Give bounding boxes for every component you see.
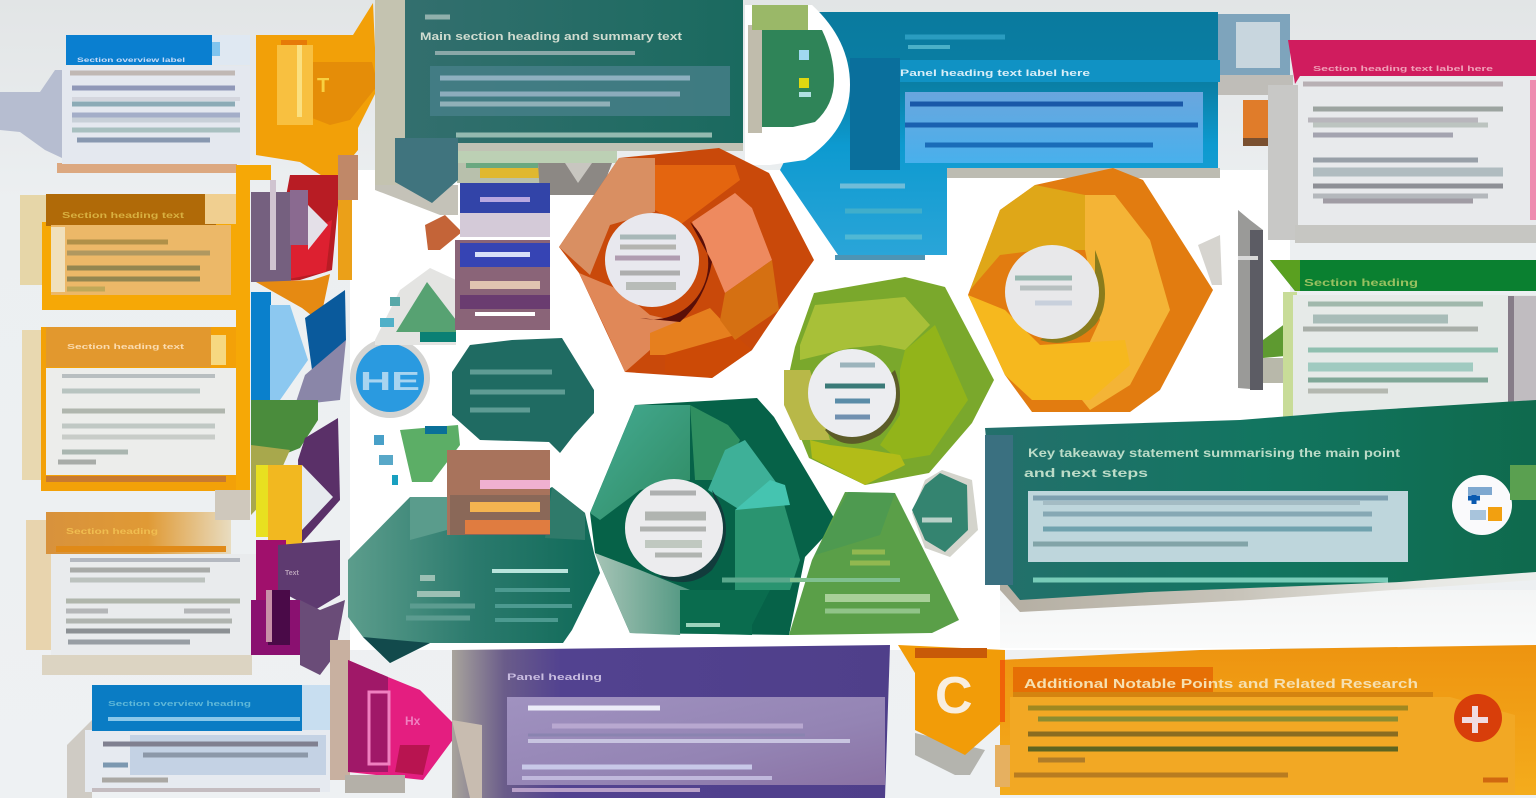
icon column: green and yellow arrow block bbox=[251, 400, 340, 545]
icon column: magenta and purple block bbox=[251, 540, 345, 675]
panel: green card bbox=[1263, 260, 1536, 420]
circle: lime segment label bbox=[808, 349, 900, 444]
stacked box: purple bbox=[455, 240, 550, 330]
icon column: purple and red arrow block bbox=[251, 155, 358, 322]
panel: tan card four: Section heading bbox=[66, 527, 158, 536]
icon column: orange folder block: T bbox=[317, 75, 329, 97]
panel: top-left blue card: Section overview label bbox=[77, 58, 186, 64]
icon column: magenta and purple block: Text bbox=[285, 570, 300, 577]
icon: orange shield with C: C bbox=[935, 667, 973, 725]
panel: orange callout bbox=[995, 645, 1536, 795]
icon: orange shield with C bbox=[898, 645, 1005, 775]
panel: orange callout: Additional Notable Points and Related Research bbox=[1024, 676, 1418, 691]
triangle: lime green segment bbox=[789, 492, 959, 635]
panel: teal header panel bbox=[375, 0, 743, 215]
panel: bottom-left blue card: Section overview heading bbox=[108, 701, 251, 708]
panel: green card: Section heading bbox=[1304, 278, 1418, 289]
icon: green tile with white arc bbox=[745, 5, 850, 165]
panel: top-left blue card bbox=[0, 35, 250, 173]
panel: dark green summary bbox=[985, 400, 1536, 612]
icon: dark vertical bar bbox=[1238, 210, 1263, 390]
panel: purple: Panel heading bbox=[507, 672, 602, 682]
panel: orange card two bbox=[20, 194, 247, 310]
stacked box: brown bbox=[447, 450, 550, 535]
icon: lower green triangle bbox=[374, 425, 460, 485]
panel: orange card three bbox=[22, 327, 246, 491]
panel: blue panel bbox=[780, 12, 1293, 260]
icon: upper green triangle bbox=[375, 268, 456, 345]
panel: pink card: Section heading text label here bbox=[1313, 66, 1493, 73]
icon: blue circle badge: HE bbox=[360, 366, 420, 396]
panel: orange card two: Section heading text bbox=[62, 211, 185, 220]
panel: purple bbox=[452, 645, 890, 798]
circle: green segment label bbox=[625, 479, 726, 582]
panel: pink pentagon: Hx bbox=[405, 714, 421, 728]
icon: summary badge bbox=[1452, 475, 1512, 535]
panel: pink card bbox=[1243, 40, 1536, 243]
panel: teal header panel: Main section heading and summary text bbox=[420, 31, 682, 43]
icon: red plus badge bbox=[1454, 694, 1502, 742]
panel: tan card four bbox=[26, 490, 256, 675]
hexagon: green segment bbox=[590, 398, 837, 635]
panel: dark teal small panel bbox=[348, 480, 600, 663]
speech bubble: teal bbox=[452, 338, 594, 453]
icon: blue circle badge bbox=[350, 338, 430, 418]
panel: pink pentagon bbox=[330, 640, 460, 793]
panel: dark green summary: and next steps bbox=[1024, 466, 1148, 480]
stacked box: blue bbox=[425, 183, 550, 250]
circle: yellow segment label bbox=[1005, 245, 1105, 343]
icon: small green hexagon bbox=[912, 470, 978, 557]
panel: blue panel: Panel heading text label here bbox=[900, 68, 1090, 78]
hexagon: lime segment bbox=[784, 277, 994, 485]
panel: bottom-left blue card bbox=[67, 685, 330, 798]
panel: orange card three: Section heading text bbox=[67, 344, 185, 351]
hexagon: orange segment bbox=[559, 148, 814, 378]
icon column: blue arrow block bbox=[251, 290, 346, 405]
circle: orange segment label bbox=[605, 213, 712, 322]
hexagon: yellow segment bbox=[968, 168, 1222, 412]
panel: dark green summary: Key takeaway statement summarising the main point bbox=[1028, 446, 1400, 460]
icon column: orange folder block bbox=[236, 3, 378, 490]
